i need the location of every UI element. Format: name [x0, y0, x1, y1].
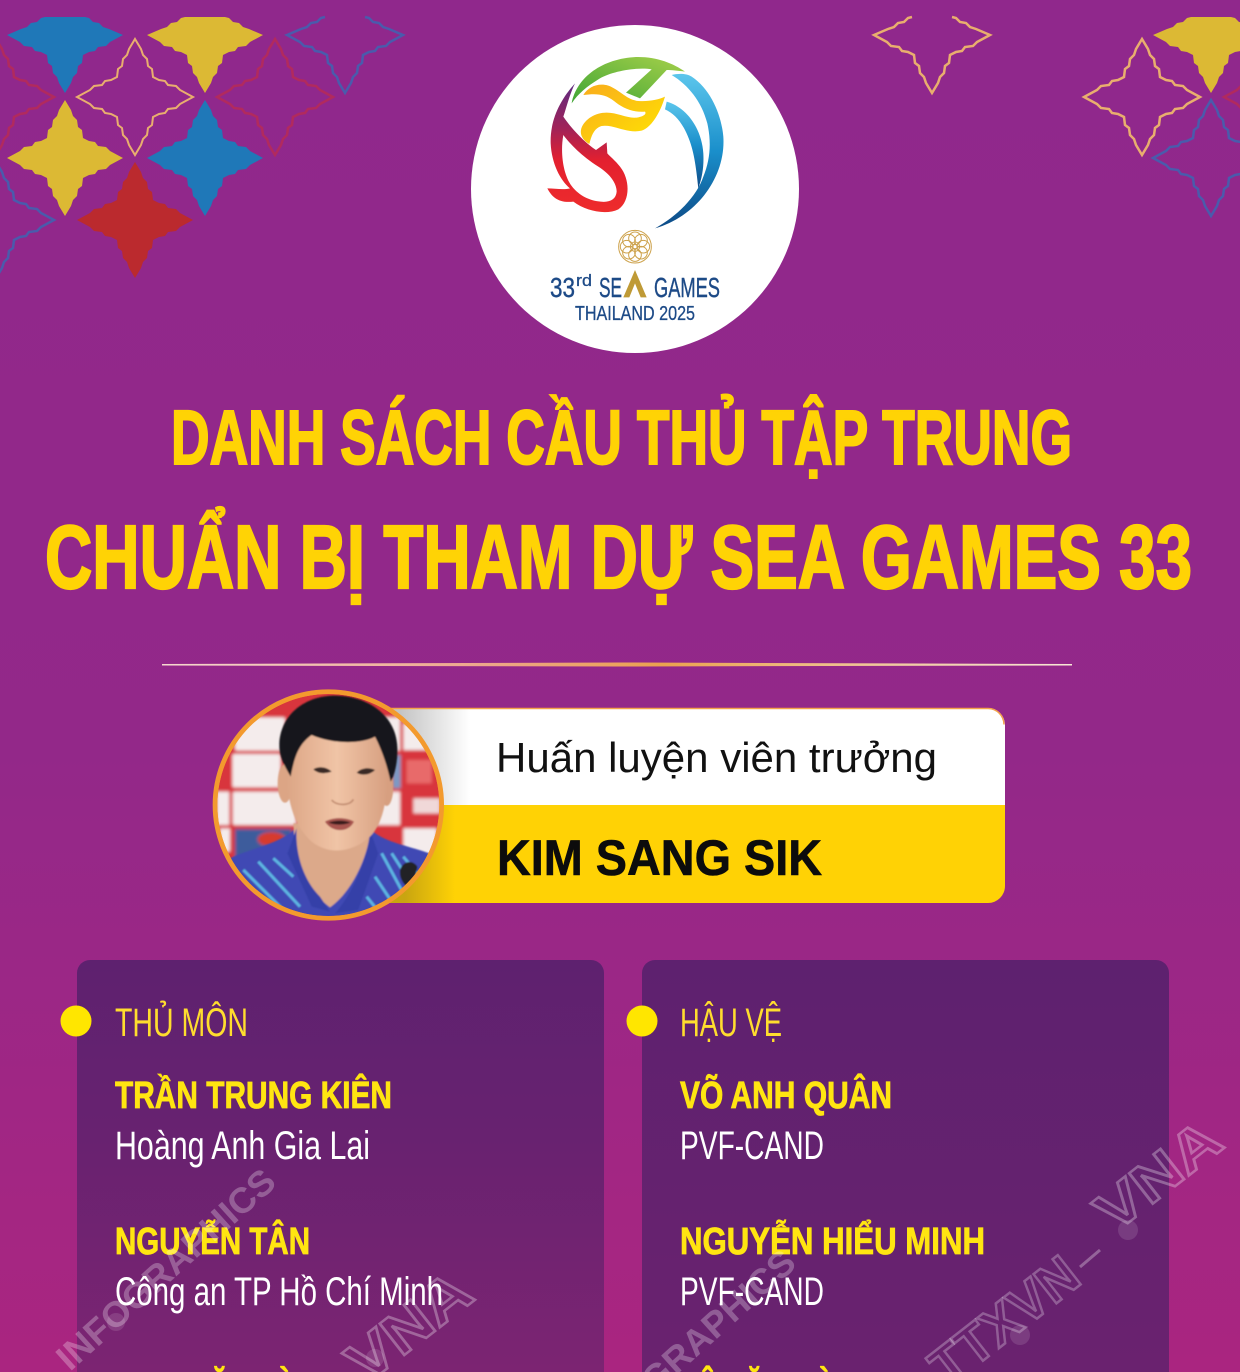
- marker dot: goalkeepers: [60, 1006, 92, 1036]
- player: Võ Anh Quân: VÕ ANH QUÂN: [680, 1073, 892, 1117]
- panel: defenders: [626, 960, 1169, 1372]
- title: [45, 394, 1192, 608]
- hair: [279, 696, 397, 782]
- decorative star pattern: top left: [0, 17, 403, 278]
- player: Võ Anh Quân: [680, 1073, 892, 1168]
- coach role bar: [380, 708, 1005, 805]
- SEA Games 33 logo badge: rd: [576, 271, 592, 290]
- SEA Games 33 logo badge: [471, 25, 799, 353]
- panel: goalkeepers: [60, 960, 604, 1372]
- heading: THỦ MÔN: THỦ MÔN: [115, 999, 248, 1045]
- player: Nguyễn Tân: [115, 1219, 443, 1314]
- watermarks: INFOGRAPHICS: [48, 1160, 283, 1372]
- shirt: [230, 830, 428, 916]
- coach portrait: [210, 687, 450, 927]
- player: Nguyễn Tân: NGUYỄN TÂN: [115, 1219, 310, 1263]
- SEA Games 33 logo badge: THAILAND 2025: [575, 303, 695, 325]
- player: Trần Trung Kiên: [115, 1073, 392, 1168]
- watermarks: VNA: [1083, 1106, 1233, 1243]
- neck and collar: [293, 823, 372, 907]
- SEA Games 33 logo badge: 33: [550, 272, 575, 303]
- watermarks: [48, 1106, 1233, 1372]
- SEA Games 33 logo badge: SE: [599, 272, 622, 303]
- SEA Games 33 logo badge: GAMES: [654, 272, 720, 303]
- player: Trần Trung Kiên: TRẦN TRUNG KIÊN: [115, 1073, 392, 1117]
- coach name bar: [380, 805, 1005, 903]
- decorative star pattern: top right: [874, 17, 1240, 216]
- marker dot: defenders: [626, 1006, 658, 1036]
- player: Trần Trung Kiên: Hoàng Anh Gia Lai: [115, 1124, 370, 1168]
- head coach card: [210, 687, 1005, 927]
- face: [278, 764, 292, 803]
- eyes, nose, mouth: [313, 767, 375, 775]
- coach role bar: Huấn luyện viên trưởng: [496, 734, 937, 781]
- player: Nguyễn Tân: Công an TP Hồ Chí Minh: [115, 1270, 443, 1314]
- player: Nguyễn Hiểu Minh: NGUYỄN HIỂU MINH: [680, 1218, 985, 1263]
- coach name bar: KIM SANG SIK: [497, 830, 822, 886]
- heading: HẬU VỆ: HẬU VỆ: [680, 1000, 782, 1045]
- player: Võ Anh Quân: PVF-CAND: [680, 1124, 824, 1168]
- player: Nguyễn Hiểu Minh: [680, 1218, 985, 1314]
- player: Nguyễn Hiểu Minh: PVF-CAND: [680, 1270, 824, 1314]
